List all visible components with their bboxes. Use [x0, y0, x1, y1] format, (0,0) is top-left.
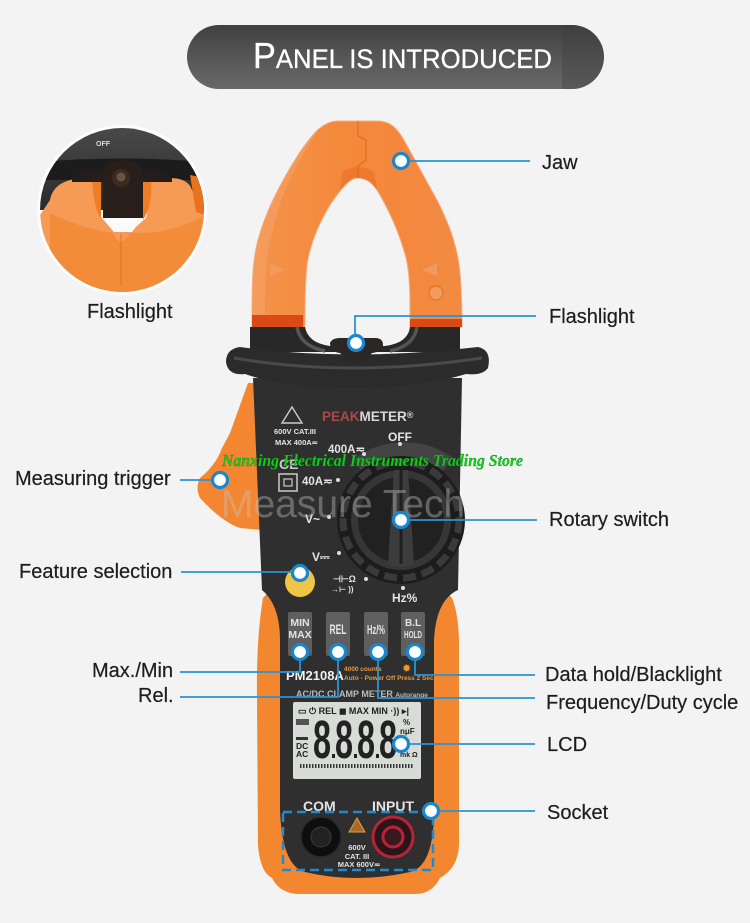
- rotary switch: [337, 456, 465, 584]
- callout: Flashlight: Flashlight: [549, 306, 635, 328]
- function buttons: MAX: [288, 629, 312, 641]
- meter face markings: ⊣⊢Ω: [333, 574, 356, 584]
- LCD display: nμF: [400, 727, 415, 736]
- inset photo: flashlight: OFF: [96, 141, 111, 148]
- sockets: 600V: [348, 843, 366, 852]
- store name overlay: Nanxing Electrical Instruments Trading Store: [221, 451, 523, 470]
- callout: Frequency/Duty cycle: [370, 644, 738, 714]
- orange housing: [257, 585, 459, 894]
- meter face markings: OFF: [388, 430, 412, 444]
- jaw base: [250, 327, 460, 352]
- sockets: CAT. III: [345, 852, 369, 861]
- LCD display: [293, 702, 421, 779]
- feature selection button: [285, 567, 315, 597]
- LCD display: 8: [379, 710, 397, 770]
- callout: Jaw: Jaw: [542, 152, 578, 174]
- callout: Feature selection: [19, 561, 308, 583]
- callout: Measuring trigger: Measuring trigger: [15, 468, 171, 490]
- model text: PM2108A: [286, 668, 344, 683]
- sockets: INPUT: [372, 798, 414, 814]
- meter face markings: MAX 400A≂: [275, 438, 319, 447]
- inset caption: Flashlight: Flashlight: [87, 301, 173, 323]
- meter face markings: 40A≂: [302, 476, 333, 488]
- callout: Data hold/Blacklight: [408, 644, 722, 686]
- LCD display: %: [403, 718, 410, 727]
- LCD display: 8: [357, 710, 375, 770]
- title: PANEL IS INTRODUCED: [253, 35, 552, 76]
- sockets: COM: [303, 798, 336, 814]
- callout: Rotary switch: [394, 509, 669, 531]
- function buttons: HOLD: [404, 630, 422, 641]
- meter face markings: [274, 407, 448, 605]
- meter face markings: V⎓: [312, 550, 330, 564]
- function buttons: MIN: [290, 617, 310, 629]
- callout: Rel.: [138, 644, 346, 707]
- LCD display: mk Ω: [400, 752, 418, 759]
- meter face markings: 400A≂: [328, 444, 365, 456]
- LCD display: 8: [313, 710, 331, 770]
- meter face markings: V~: [305, 512, 320, 526]
- model text: Auto - Power Off Press 2 Sec: [344, 675, 434, 682]
- sockets: [283, 798, 433, 870]
- meter body: [253, 378, 462, 878]
- callout: Max./Min: [92, 644, 308, 682]
- jaw: [250, 121, 462, 352]
- LCD display: AC: [296, 749, 308, 759]
- sockets: MAX 600V≂: [338, 860, 381, 869]
- callout: Socket: Socket: [547, 802, 609, 824]
- trigger: [198, 383, 262, 530]
- function buttons: B.L: [405, 618, 421, 629]
- title: [187, 25, 604, 89]
- callout: Data hold/Blacklight: Data hold/Blacklight: [545, 664, 722, 686]
- model text: AC/DC CLAMP METER Autorange: [296, 689, 428, 699]
- clamp meter: [198, 121, 489, 894]
- meter face markings: 600V CAT.III: [274, 427, 316, 436]
- function buttons: [288, 612, 425, 656]
- LCD display: 8: [335, 710, 353, 770]
- callout: LCD: [394, 734, 587, 756]
- collar: [226, 347, 489, 388]
- meter face markings: ®: [407, 410, 414, 420]
- callout: Jaw: [394, 152, 578, 174]
- model text: [286, 663, 434, 699]
- callout: Flashlight: [348, 306, 635, 350]
- model text: ✹: [402, 663, 411, 675]
- LCD display: ▭ ⏻ REL ◼ MAX MIN ·)) ▸|: [298, 706, 409, 716]
- callout: Feature selection: Feature selection: [19, 561, 172, 583]
- callout: Rotary switch: Rotary switch: [549, 509, 669, 531]
- function buttons: REL: [330, 621, 347, 637]
- callout: Socket: [424, 802, 609, 824]
- meter face markings: PEAKMETER: [322, 409, 407, 424]
- function buttons: Hz/%: [367, 622, 385, 637]
- meter face markings: CE: [279, 456, 298, 472]
- callout: Rel.: Rel.: [138, 685, 174, 707]
- watermark: Measure Tech: [221, 483, 465, 526]
- flashlight housing: [330, 338, 383, 363]
- model text: 4000 counts: [344, 666, 382, 673]
- callout: Frequency/Duty cycle: Frequency/Duty cycle: [546, 692, 738, 714]
- inset photo: flashlight: [35, 120, 210, 300]
- callout: Max./Min: Max./Min: [92, 660, 173, 682]
- callout: LCD: LCD: [547, 734, 587, 756]
- meter face markings: Hz%: [392, 591, 418, 605]
- LCD display: DC: [296, 741, 308, 751]
- meter face markings: →⊢ )): [331, 584, 354, 594]
